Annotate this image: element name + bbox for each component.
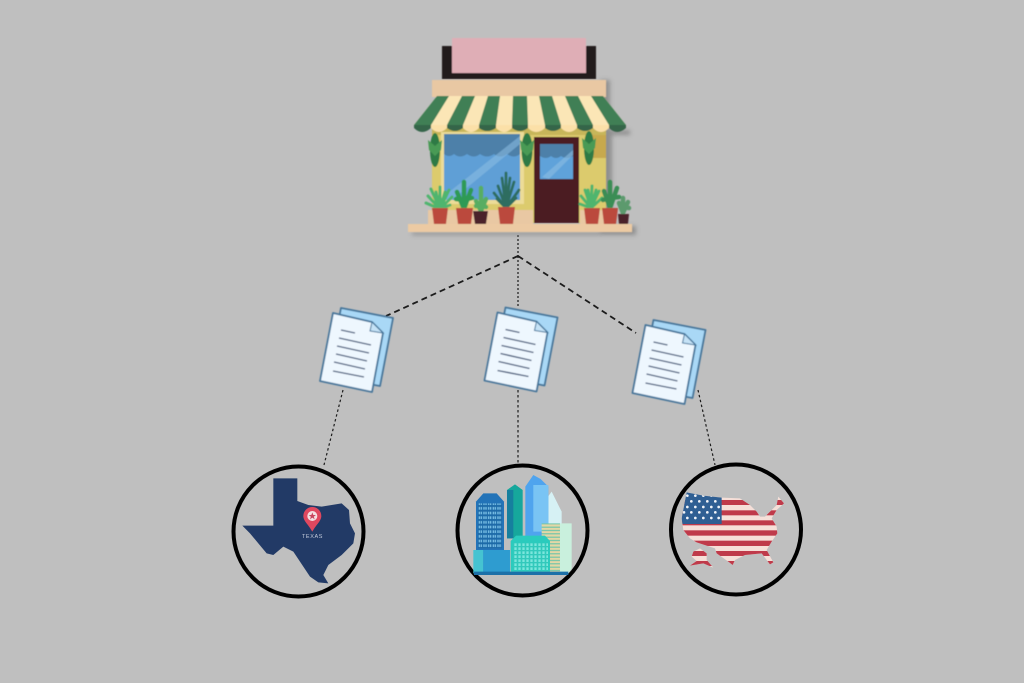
location pin xyxy=(303,507,321,532)
sidewalk ledge xyxy=(408,224,632,232)
flower pots xyxy=(432,207,629,224)
buildings xyxy=(473,475,572,575)
hanging vines xyxy=(428,131,596,167)
striped awning xyxy=(414,96,626,132)
circle: city skyline xyxy=(458,466,588,596)
Texas label: TEXAS xyxy=(302,534,323,540)
icon: documents left xyxy=(320,308,393,392)
circle: Texas map xyxy=(234,466,364,596)
shop window xyxy=(441,132,524,204)
sign board xyxy=(442,38,596,79)
icon: storefront xyxy=(408,38,636,235)
flag map xyxy=(682,492,784,568)
circle: USA flag map xyxy=(671,464,801,594)
potted plants xyxy=(426,173,629,213)
door xyxy=(534,137,579,223)
diagram canvas xyxy=(232,38,803,598)
store wall xyxy=(428,80,610,224)
Texas shape xyxy=(242,478,355,583)
store shadow xyxy=(412,50,636,235)
connector lines xyxy=(324,235,715,465)
icon: documents right xyxy=(632,320,706,404)
icon: documents center xyxy=(484,308,558,392)
